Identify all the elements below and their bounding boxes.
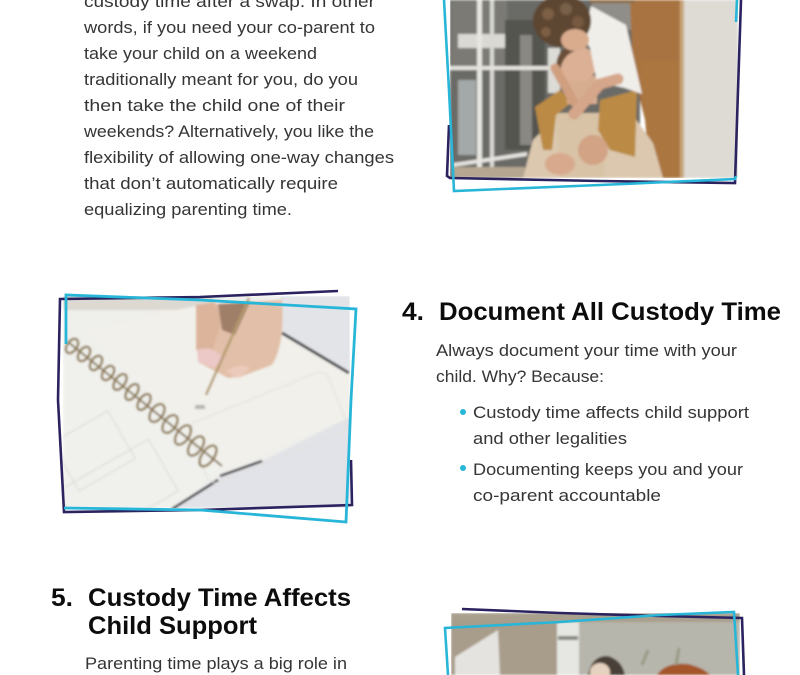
frame: navy stroke <box>462 609 744 675</box>
section 5 heading: 5. <box>51 584 73 612</box>
bullet: documenting keeps you accountable <box>460 460 743 505</box>
text block: section 3 continuation: then take the child one of their <box>84 96 345 115</box>
frame: cyan stroke <box>445 612 738 675</box>
text block: section 3 continuation: traditionally meant for you, do you <box>84 70 358 89</box>
frame: cyan stroke <box>64 295 356 522</box>
section 5 heading: Child Support <box>88 612 258 640</box>
text block: section 3 continuation: words, if you need your co-parent to <box>83 18 375 37</box>
bullet: custody time affects child support: and other legalities <box>473 429 627 448</box>
text block: section 3 continuation: flexibility of allowing one-way changes <box>84 148 394 167</box>
text block: section 3 continuation <box>83 0 394 219</box>
bullet: custody time affects child support: Custody time affects child support <box>473 403 749 422</box>
bullet: documenting keeps you accountable: co-parent accountable <box>473 486 661 505</box>
photo: hand writing in spiral notebook, with frame <box>52 291 356 543</box>
text block: section 3 continuation: that don’t automatically require <box>84 174 338 193</box>
bullet: documenting keeps you accountable: Documenting keeps you and your <box>473 460 743 479</box>
text block: section 3 continuation: take your child on a weekend <box>84 44 317 63</box>
section 5 heading <box>51 584 351 640</box>
bullet: custody time affects child support <box>460 403 749 448</box>
frame: navy stroke <box>447 0 741 183</box>
frame: cyan stroke <box>444 0 737 191</box>
photo: child kissing parent's forehead, with frame <box>444 0 741 191</box>
text block: section 3 continuation: equalizing parenting time. <box>84 200 292 219</box>
section 4 heading: Document All Custody Time <box>439 298 781 326</box>
section 4 intro text: Always document your time with your <box>436 341 737 360</box>
section 5 heading: Custody Time Affects <box>88 584 351 612</box>
section 4 intro text <box>436 341 737 386</box>
section 4 heading: 4. <box>402 298 424 326</box>
frame: navy stroke <box>58 291 352 512</box>
section 4 intro text: child. Why? Because: <box>436 367 604 386</box>
text block: section 3 continuation: weekends? Alternatively, you like the <box>83 122 374 141</box>
section 5 body text: Parenting time plays a big role in <box>85 654 347 673</box>
photo: parent and child at home, with frame <box>445 609 744 675</box>
